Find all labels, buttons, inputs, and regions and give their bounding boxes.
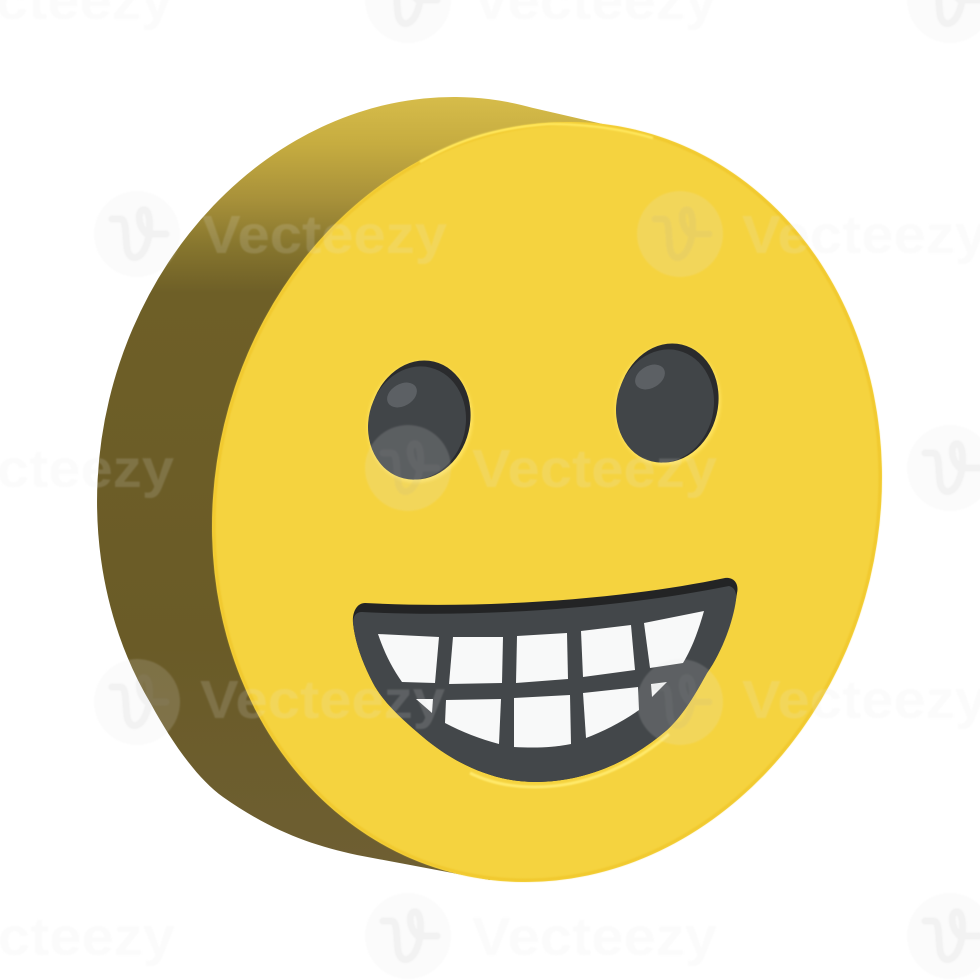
mouth with teeth: [353, 578, 738, 787]
watermark row 4: [94, 659, 980, 745]
side wall of the emoji disc: [97, 97, 604, 880]
watermark row 3: Vecteezy: [472, 439, 717, 499]
left eye: [355, 350, 485, 493]
watermark row 3: [0, 425, 980, 511]
front face of the emoji: [135, 52, 959, 952]
watermark row 2: [94, 191, 980, 277]
upper teeth: [378, 611, 704, 684]
watermark row 2: Vecteezy: [742, 205, 980, 265]
watermark row 5: Vecteezy: [472, 907, 717, 967]
watermark row 5: [0, 893, 980, 979]
watermark row 1: [0, 0, 980, 43]
watermark row 4: Vecteezy: [742, 670, 980, 730]
watermark row 2: Vecteezy: [202, 205, 447, 265]
right eye: [603, 333, 733, 476]
watermark row 4: Vecteezy: [200, 670, 445, 730]
lower teeth: [416, 682, 667, 748]
